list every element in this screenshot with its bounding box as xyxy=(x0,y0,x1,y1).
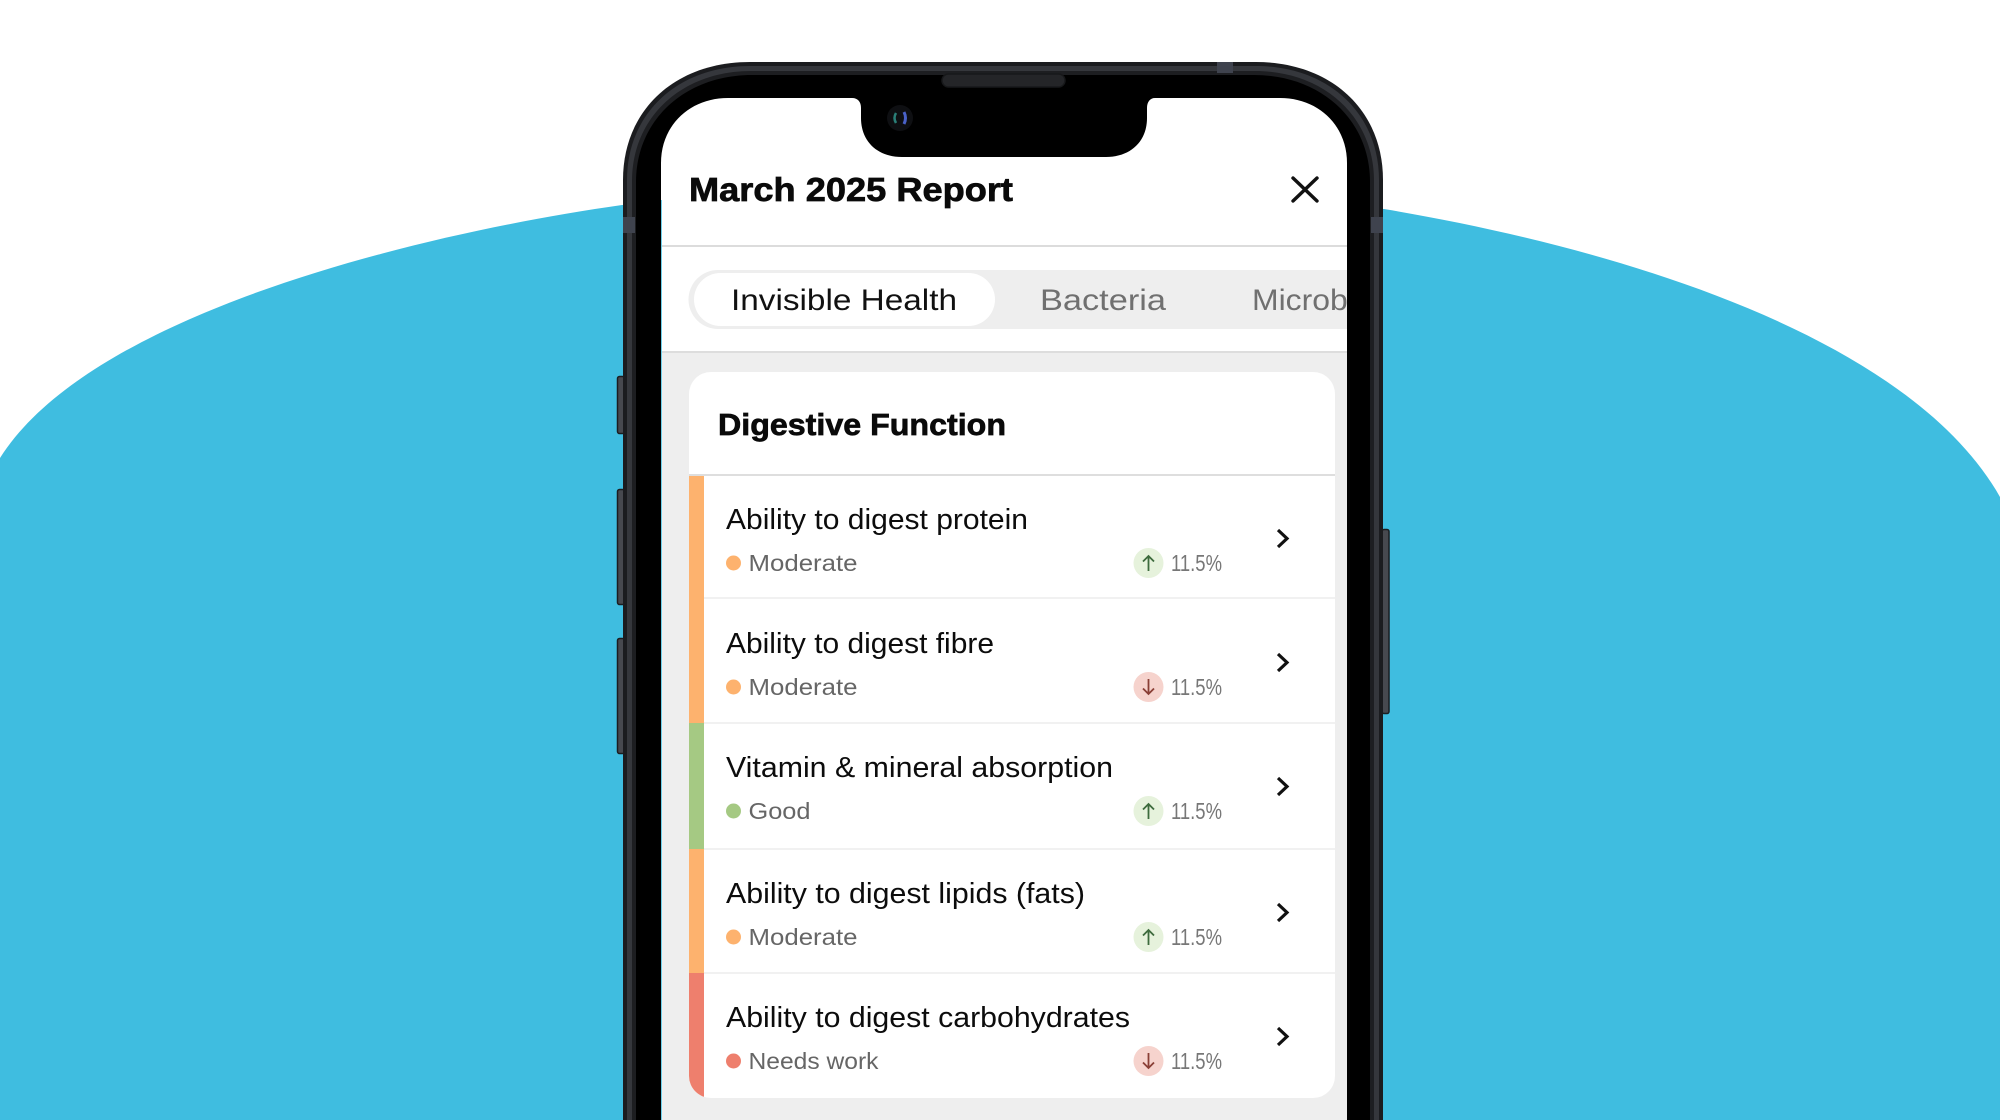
active tab pill xyxy=(694,273,995,326)
header divider xyxy=(662,245,1347,247)
tab: Microbiome: Microbiome xyxy=(1252,284,1417,317)
status dot xyxy=(726,1054,741,1068)
row title: Ability to digest protein xyxy=(726,504,1028,536)
phone frame highlight xyxy=(627,66,1379,1120)
trend badge up xyxy=(1134,796,1164,826)
row title: Ability to digest fibre xyxy=(726,628,994,660)
speaker xyxy=(942,74,1065,87)
notch xyxy=(852,92,1155,157)
card background xyxy=(689,372,1335,1098)
status label: Good xyxy=(748,798,810,824)
row title: Ability to digest lipids (fats) xyxy=(726,878,1085,910)
row: ability to digest lipids xyxy=(726,878,1287,952)
tabs divider xyxy=(662,351,1347,353)
frame antenna bands xyxy=(623,62,1383,233)
percent change: 11.5% xyxy=(1171,1048,1222,1074)
row: ability to digest fibre xyxy=(726,628,1287,702)
row title: Vitamin & mineral absorption xyxy=(726,752,1113,784)
percent change: 11.5% xyxy=(1171,674,1222,700)
tab bar xyxy=(688,270,1417,329)
row dividers xyxy=(689,597,1335,974)
status label: Moderate xyxy=(748,674,858,700)
status label: Moderate xyxy=(748,924,858,950)
row: vitamin and mineral absorption xyxy=(726,752,1287,826)
phone inner bezel xyxy=(636,75,1370,1120)
tab: Bacteria: Bacteria xyxy=(1040,284,1166,317)
screen edge highlight xyxy=(661,200,662,1120)
icon: chevron xyxy=(1278,654,1287,671)
percent change: 11.5% xyxy=(1171,924,1222,950)
tab: Invisible Health: Invisible Health xyxy=(731,284,957,317)
trend badge down xyxy=(1134,672,1164,702)
card heading: Digestive Function xyxy=(718,407,1006,442)
trend badge up xyxy=(1134,548,1164,578)
phone xyxy=(618,62,1417,1120)
status dot xyxy=(726,680,741,694)
status label: Moderate xyxy=(748,550,858,576)
panel: digestive function card xyxy=(689,372,1335,1098)
heading divider xyxy=(689,474,1335,476)
screen background xyxy=(661,98,1347,351)
trend badge up xyxy=(1134,922,1164,952)
icon: chevron xyxy=(1278,530,1287,547)
trend badge down xyxy=(1134,1046,1164,1076)
status colour bars xyxy=(689,476,704,1098)
icon: close xyxy=(1293,178,1317,201)
camera xyxy=(887,105,913,131)
screen xyxy=(660,98,1417,1120)
icon: chevron xyxy=(1278,904,1287,921)
status dot xyxy=(726,930,741,944)
tab track xyxy=(688,270,1347,329)
status dot xyxy=(726,804,741,818)
title: March 2025 Report xyxy=(689,171,1013,208)
row title: Ability to digest carbohydrates xyxy=(726,1002,1130,1034)
status label: Needs work xyxy=(748,1048,879,1074)
row: ability to digest protein xyxy=(726,504,1287,578)
icon: chevron xyxy=(1278,778,1287,795)
side buttons xyxy=(618,376,1389,754)
phone frame xyxy=(623,62,1383,1120)
percent change: 11.5% xyxy=(1171,550,1222,576)
status dot xyxy=(726,556,741,570)
icon: chevron xyxy=(1278,1028,1287,1045)
row: ability to digest carbohydrates xyxy=(726,1002,1287,1076)
grey content area xyxy=(662,352,1347,1120)
percent change: 11.5% xyxy=(1171,798,1222,824)
phone frame shade xyxy=(632,71,1374,1120)
